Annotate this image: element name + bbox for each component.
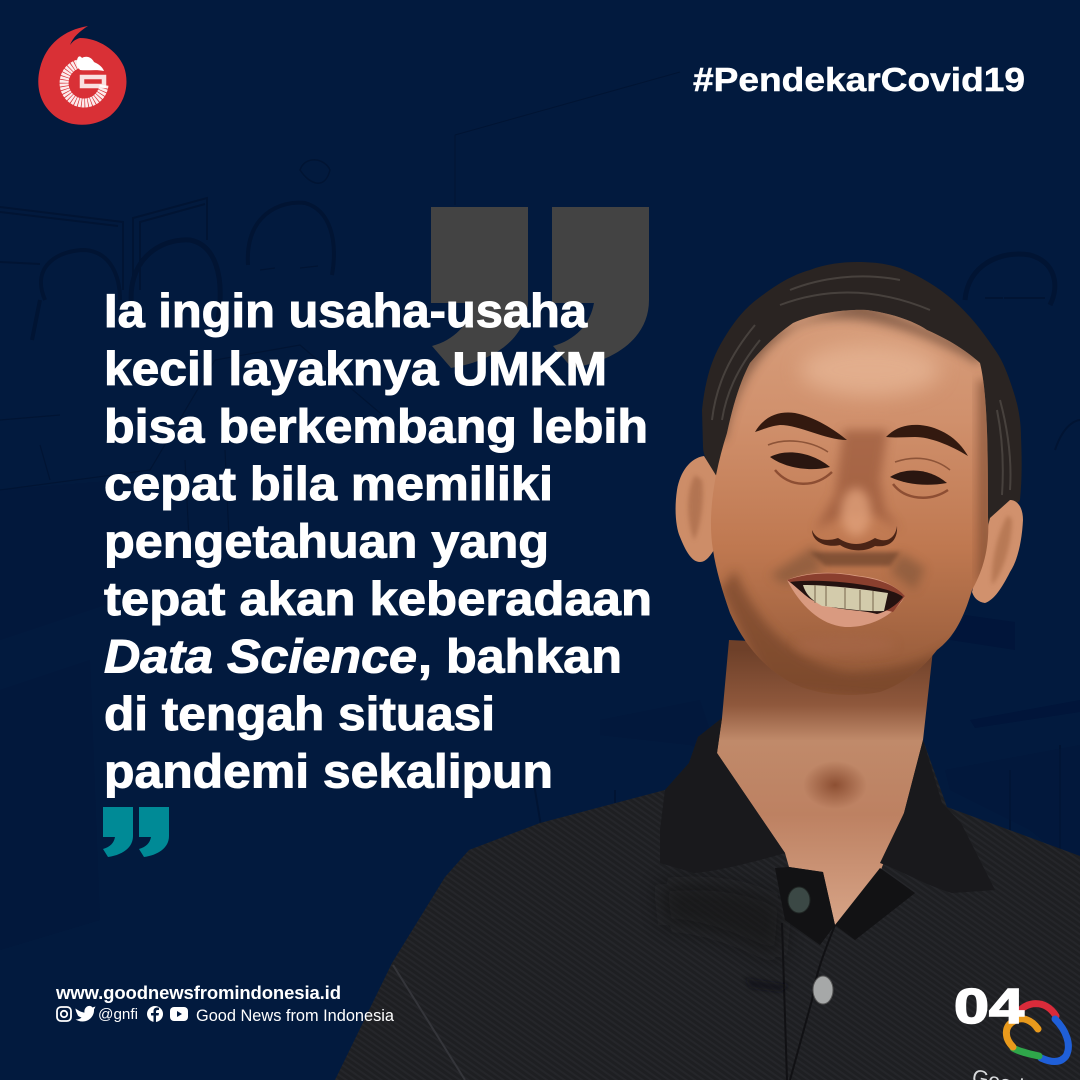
hair highlights (712, 276, 1011, 495)
quote text: , bahkan (418, 630, 622, 682)
placket and under collar shadow (775, 867, 915, 945)
quote text: di tengah situasi (104, 687, 495, 740)
quote text: pengetahuan yang (104, 514, 549, 568)
footer page name: Good News from Indonesia (196, 1006, 395, 1025)
nose (812, 488, 897, 550)
quote text: cepat bila memiliki (104, 457, 553, 510)
hashtag: #PendekarCovid19 (693, 61, 1025, 98)
neck (717, 640, 933, 925)
large grey quotation mark (431, 207, 649, 368)
right ear inner (992, 515, 1012, 585)
right face shade (978, 380, 992, 580)
nose bridge shadow (815, 430, 900, 530)
hairline shadow (715, 300, 980, 440)
logo G emblem (64, 56, 104, 103)
under nose shadow (810, 552, 900, 566)
icon: youtube (170, 1007, 188, 1021)
quote text: tepat akan keberadaan (104, 572, 652, 625)
hair (702, 262, 1022, 535)
small teal quotation mark (103, 807, 169, 857)
neck crease (803, 761, 867, 809)
left ear inner (688, 475, 703, 540)
face (711, 310, 988, 695)
collar button (788, 887, 810, 913)
quote text (104, 284, 652, 798)
icon: twitter (76, 1006, 96, 1022)
eyes (768, 441, 950, 498)
quote text: pandemi sekalipun (104, 744, 553, 798)
quote text: bisa berkembang lebih (104, 400, 648, 452)
logo: red swirl with garuda G (38, 26, 126, 125)
page number: 04 (954, 980, 1024, 1034)
quote text: Ia ingin usaha-usaha (104, 284, 588, 337)
eyebrows (755, 413, 968, 456)
icon: facebook (147, 1006, 163, 1022)
quote text: Data Science (104, 630, 417, 682)
left ear (676, 456, 717, 562)
stubble (770, 545, 925, 590)
icon: instagram (57, 1007, 71, 1021)
placket button (813, 976, 833, 1004)
chin shadow (795, 635, 895, 655)
portrait of speaker (335, 262, 1080, 1080)
shirt folds (393, 883, 835, 1080)
left collar (660, 718, 785, 873)
social handle: @gnfi (98, 1006, 138, 1023)
mouth (787, 573, 905, 627)
logo swirl shape (38, 26, 126, 125)
jaw shading (720, 570, 936, 695)
right collar (880, 740, 995, 893)
right ear (972, 500, 1023, 603)
shirt body (335, 718, 1080, 1080)
google cloud logo embroidery (1006, 1004, 1068, 1062)
quote text: kecil layaknya UMKM (104, 342, 607, 395)
footer website: www.goodnewsfromindonesia.id (55, 982, 341, 1003)
ghosted team photo background (0, 72, 1080, 900)
forehead highlight (800, 344, 940, 396)
